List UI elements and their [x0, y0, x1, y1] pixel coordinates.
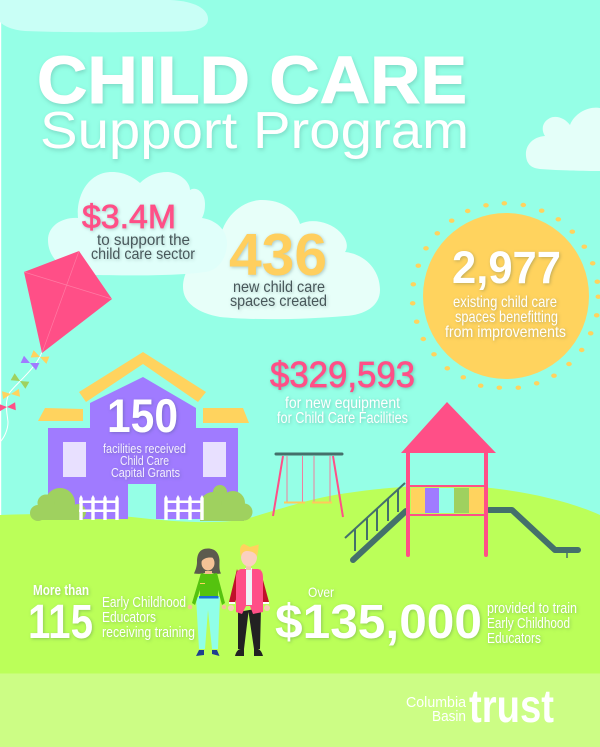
- stat: $329,593 equipment: $329,593: [270, 354, 415, 395]
- stat: 150 facilities: facilities received: [103, 441, 186, 456]
- cloud: right: [526, 108, 600, 171]
- stat: 2,977 existing spaces: [445, 242, 566, 341]
- stat: 2,977 existing spaces: spaces benefitting: [455, 309, 558, 326]
- stat: $329,593 equipment: for Child Care Facilities: [277, 410, 408, 427]
- stat: $135,000 training funds: Early Childhood: [487, 616, 570, 632]
- picket fences: [79, 495, 204, 520]
- logo: Columbia Basin Trust: [406, 680, 554, 732]
- logo: Columbia Basin Trust: trust: [469, 680, 554, 732]
- house: [38, 352, 249, 519]
- stat: 2,977 existing spaces: from improvements: [445, 324, 566, 341]
- stat: $329,593 equipment: for new equipment: [285, 395, 401, 412]
- kite: [0, 251, 112, 442]
- stat: 115 educators: Early Childhood: [102, 595, 186, 611]
- stat: $135,000 training funds: [275, 584, 577, 649]
- stat: $135,000 training funds: $135,000: [275, 596, 482, 649]
- title: [37, 43, 469, 160]
- logo: Columbia Basin Trust: Basin: [432, 709, 466, 725]
- cloud: sector funding: [48, 172, 227, 275]
- stat: 150 facilities: [103, 389, 186, 480]
- logo: Columbia Basin Trust: Columbia: [406, 695, 467, 711]
- play structure with ladder and slide: [345, 402, 578, 560]
- person: woman: [188, 548, 226, 656]
- title: CHILD CARE: [37, 43, 467, 118]
- footer band: [0, 674, 600, 747]
- stat: 436 new spaces: new child care: [233, 279, 325, 296]
- hill: [0, 485, 600, 680]
- swing set: [273, 454, 343, 517]
- stat: 115 educators: Educators: [102, 610, 156, 626]
- stat: 115 educators: receiving training: [102, 625, 195, 641]
- stat: 115 educators: More than: [33, 583, 89, 599]
- stat: 436 new spaces: 436: [229, 222, 327, 288]
- stat: $3.4M: to support the: [97, 232, 190, 249]
- title: Support Program: [40, 102, 469, 160]
- person: man: [228, 544, 270, 656]
- stat: $329,593 equipment: [270, 354, 415, 427]
- cloud: top left: [0, 0, 208, 32]
- stat: 2,977 existing spaces: 2,977: [452, 242, 561, 293]
- stat: 115 educators: 115: [28, 596, 93, 649]
- bushes: [30, 485, 252, 521]
- stat: 150 facilities: 150: [107, 389, 178, 442]
- stat: $135,000 training funds: Over: [308, 584, 334, 600]
- stat: 150 facilities: Child Care: [120, 453, 169, 468]
- stat: $3.4M: child care sector: [91, 246, 196, 263]
- stat: 150 facilities: Capital Grants: [111, 465, 180, 480]
- stat: $3.4M: $3.4M: [82, 198, 176, 235]
- sun: [410, 201, 600, 390]
- stat: $135,000 training funds: Educators: [487, 631, 541, 647]
- cloud: new spaces: [183, 200, 380, 319]
- stat: $3.4M: [82, 198, 196, 263]
- stat: 115 educators: [28, 583, 195, 649]
- stat: 2,977 existing spaces: existing child care: [453, 294, 557, 311]
- stat: $135,000 training funds: provided to train: [487, 601, 577, 617]
- stat: 436 new spaces: spaces created: [230, 293, 327, 310]
